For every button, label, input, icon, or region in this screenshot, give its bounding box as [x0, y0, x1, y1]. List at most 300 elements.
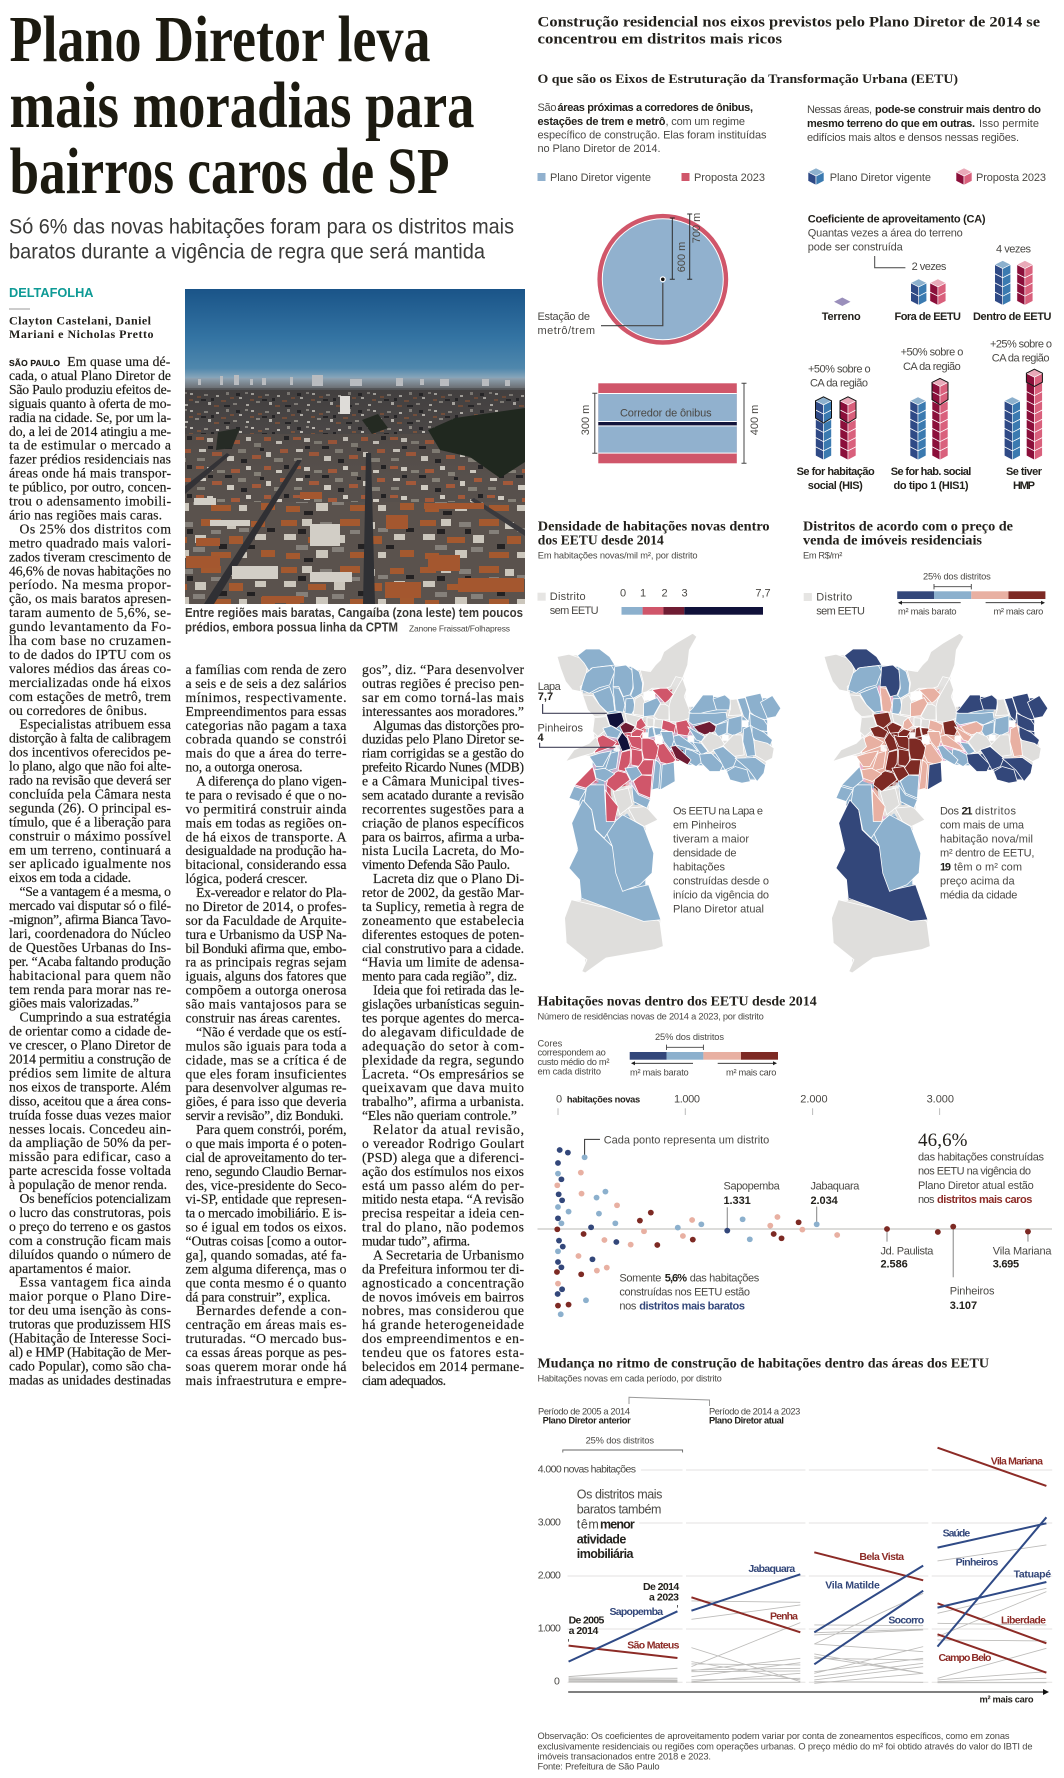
article column 3: duzidas pelo Plano Diretor se-: [362, 732, 524, 747]
slope chart: price direction arrow: m² mais caro: [980, 1695, 1034, 1705]
article column 3: Algumas das distorções pro-: [373, 718, 524, 733]
article column 2: mais do que a área do terre-: [186, 746, 347, 761]
article column 1: -mignon”, afirma Bianca Tavo-: [9, 912, 171, 927]
article column 3: ta Suplicy, remetia à regra de: [362, 899, 524, 914]
article column 2: “Não é verdade que os estí-: [196, 1024, 347, 1039]
article column 1: ção, os mais baratos apresen-: [9, 591, 171, 606]
article column 1: tor deu uma isenção às cons-: [9, 1303, 171, 1318]
article column 3: ação dos estímulos nos eixos: [362, 1164, 524, 1179]
callout: 46.6% in most expensive districts: nos EETU na vigência do: [918, 1166, 1031, 1178]
cube towers: popular market housing HMP: +25% sobre o: [990, 339, 1052, 351]
legend: dot colours: correspondem ao: [538, 1048, 606, 1058]
dot labels: 3.107: [950, 1300, 977, 1312]
heading: price map: [803, 520, 1013, 560]
article column 1: maior porque o Plano Dire-: [9, 1289, 171, 1304]
article column 1: de Questões Urbanas do Ins-: [9, 940, 171, 955]
article column 2: tura e Urbanismo da USP Na-: [186, 927, 347, 942]
article column 3: o vereador Rodrigo Goulart: [362, 1136, 524, 1151]
legend: comparison periods: 25% dos distritos: [586, 1435, 654, 1445]
cube towers: inside EETU: 4 vezes: [996, 244, 1032, 256]
annotation: density map: em Pinheiros: [673, 820, 737, 832]
diagram: station radius circle: Estação de: [538, 311, 590, 323]
article column 3: plexidade da regra, segundo: [362, 1052, 524, 1067]
annotation: price map: distritos: [975, 806, 1016, 818]
article column 3: Relator da atual revisão,: [373, 1122, 524, 1137]
article column 2: ra as principais regras sejam: [186, 955, 347, 970]
article column 3: interessantes aos moradores.”: [362, 704, 524, 719]
text block: building coefficient: pode ser construída: [808, 242, 904, 254]
article column 3: Lacreta diz que o Plano Di-: [373, 871, 524, 886]
article column 1: siguais quanto à oferta de mo-: [9, 396, 171, 411]
subtitle: [9, 216, 514, 264]
dot labels: [604, 1134, 1052, 1312]
slope chart axis labels: [538, 1463, 636, 1688]
slope chart axis labels: 3.000: [538, 1516, 561, 1528]
article column 3: Ideia que foi retirada das le-: [373, 983, 524, 998]
article column 2: truturadas. “O mercado bus-: [186, 1331, 347, 1346]
article column 1: à população de menor renda.: [9, 1177, 167, 1192]
text block: higher building capacity: edifícios mais altos e densos nessas regiões.: [807, 132, 1019, 144]
text block: higher building capacity: mesmo terreno do que em outras.: [807, 118, 975, 130]
cube towers: social housing type 1: +50% sobre o: [901, 347, 963, 359]
article column 3: mento para cada região”, diz.: [362, 969, 517, 984]
article column 2: bil Bonduki afirma que, embo-: [186, 941, 347, 956]
article column 3: outras regiões é preciso pen-: [362, 676, 524, 691]
callout: 5.6% in cheapest districts: distritos mais baratos: [639, 1300, 745, 1312]
legend: dot colours: em cada distrito: [538, 1067, 601, 1077]
article column 2: servir a revisão”, diz Bonduki.: [186, 1108, 344, 1123]
article column 1: período. Na mesma propor-: [9, 577, 171, 592]
article column 1: de orientar como a cidade de-: [9, 1024, 171, 1039]
cube towers: outside EETU: 2 vezes: [912, 261, 947, 273]
legend: density scale: 7,7: [755, 588, 771, 600]
annotation: price map: têm o m² com: [954, 862, 1022, 874]
slope chart: grid: [568, 1470, 1052, 1682]
photo: aerial view of Cangaíba: [185, 289, 525, 604]
text block: higher building capacity: Isso permite: [979, 118, 1039, 130]
article column 1: trutoras que produzissem HIS: [9, 1317, 171, 1332]
callout: 46.6% in most expensive districts: distritos mais caros: [937, 1194, 1032, 1206]
dot labels: Sapopemba: [724, 1180, 781, 1192]
text block: building coefficient: [808, 214, 986, 268]
article column 1: Especialistas atribuem essa: [20, 717, 171, 732]
article column 2: so é igual em todos os eixos.: [186, 1220, 346, 1235]
dot chart: housing per district: [554, 1139, 1031, 1317]
graphic main heading: Construção residencial nos eixos previstos pelo Plano Diretor de 2014 se: [538, 14, 1040, 30]
article column 2: [186, 662, 347, 1388]
heading: density map: Em habitações novas/mil m², por distrito: [538, 550, 698, 560]
callout: 46.6% in most expensive districts: 46,6%: [918, 1130, 968, 1151]
article column 2: o que mais importa é o poten-: [186, 1136, 347, 1151]
legend: comparison periods: Plano Diretor atual: [709, 1415, 784, 1425]
article column 2: bitacional, considerando essa: [186, 857, 346, 872]
cube towers: popular market housing HMP: HMP: [1013, 480, 1035, 492]
callout: 5.6% in cheapest districts: nos: [619, 1300, 637, 1312]
annotation: price map: 19: [940, 862, 951, 874]
diagram: bus corridor: 300 m: [580, 405, 592, 435]
heading: price map: Distritos de acordo com o preço de: [803, 520, 1013, 535]
slope chart: labels: Bela Vista: [859, 1551, 904, 1563]
cube towers: social housing type 1: CA da região: [903, 361, 961, 373]
legend: dot colours: 25% dos distritos: [655, 1032, 724, 1042]
article column 1: per. “Acaba faltando produção: [9, 954, 171, 969]
diagram: station radius circle: [538, 213, 728, 345]
article column 2: Empreendimentos para essas: [186, 704, 346, 719]
article column 1: “Se a vantagem é a mesma, o: [20, 884, 171, 899]
callout: 5.6% in cheapest districts: construídas nos EETU estão: [619, 1286, 750, 1298]
cube towers: outside EETU: [894, 261, 961, 323]
article column 2: no Diretor de 2014, o profes-: [186, 899, 347, 914]
article column 2: Bernardes defende a con-: [196, 1303, 347, 1318]
annotation: cheapest districts lower activity: Os distritos mais: [577, 1488, 662, 1502]
article column 3: nobres, mas considerou que: [362, 1303, 524, 1318]
article column 1: radia na cidade. Se, por um la-: [9, 410, 171, 425]
article column 1: diluídos quando o número de: [9, 1247, 171, 1262]
dot labels: Vila Mariana: [993, 1245, 1052, 1257]
annotation: density map: habitações: [673, 862, 726, 874]
article column 1: (Habitação de Interesse Soci-: [9, 1330, 171, 1346]
cube towers: inside EETU: [973, 244, 1052, 323]
axis: new housing units: habitações novas: [567, 1095, 640, 1105]
legend: cube colours: [808, 168, 1046, 185]
article column 1: Os benefícios potencializam: [20, 1191, 171, 1206]
legend: price quartiles: [804, 571, 1045, 618]
article column 1: nesses locais. Concedeu ain-: [9, 1121, 171, 1136]
heading: density map: Densidade de habitações novas dentro: [538, 520, 770, 535]
legend: price quartiles: sem EETU: [816, 606, 865, 618]
article column 1: SÃO PAULO: [9, 358, 60, 368]
annotation: density map: construídas desde o: [673, 876, 769, 888]
heading: price map: venda de imóveis residenciais: [803, 534, 983, 549]
callouts: Lapa and Pinheiros: 4: [538, 732, 544, 744]
axis: new housing units: [538, 1094, 1052, 1229]
dot labels: Jabaquara: [810, 1180, 860, 1192]
article column 2: Ex-vereador e relator do Pla-: [196, 885, 347, 900]
legend: price quartiles: m² mais barato: [898, 606, 957, 616]
article column 2: mais infraestrutura e empre-: [186, 1373, 347, 1388]
slope chart: labels: De 2005: [569, 1614, 605, 1626]
annotation: density map: Os EETU na Lapa e: [673, 806, 763, 818]
slope chart: labels: Pinheiros: [956, 1557, 998, 1569]
callout: 5.6% in cheapest districts: [619, 1272, 760, 1312]
diagram: bus corridor: 400 m: [749, 405, 761, 435]
article column 2: ta o mercado imobiliário. E is-: [186, 1206, 347, 1221]
article column 3: vimento Defenda São Paulo.: [362, 857, 510, 872]
annotation: price map: Dos: [940, 806, 960, 818]
article column 1: parte acrescida fosse voltada: [9, 1163, 171, 1178]
legend: dot colours: m² mais barato: [630, 1068, 689, 1078]
article column 3: nista Lucila Lacreta, do Mo-: [362, 843, 524, 858]
article column 2: compõem a outorga onerosa: [186, 983, 346, 998]
article column 3: mudar tudo”, afirma.: [362, 1234, 470, 1248]
text block: building coefficient: Quantas vezes a área do terreno: [808, 228, 963, 240]
legend: price quartiles: m² mais caro: [994, 606, 1043, 616]
heading: new housing dot chart: Número de residências novas de 2014 a 2023, por distrito: [538, 1011, 764, 1021]
article column 2: dá para construir”, explica.: [186, 1289, 330, 1304]
article column 1: mercializadas onde há eixos: [9, 675, 171, 690]
cube towers: outside EETU: Fora de EETU: [894, 311, 961, 323]
slope chart: price direction arrow: [568, 1689, 1049, 1705]
annotation: price map: [940, 806, 1034, 901]
callouts: Lapa and Pinheiros: 7,7: [538, 691, 553, 703]
article column 2: que eles foram insuficientes: [186, 1066, 346, 1081]
article column 2: vo permitirá construir ainda: [186, 801, 346, 816]
article column 3: Lacreta. “Os empresários se: [362, 1066, 524, 1081]
callouts: Lapa and Pinheiros: [538, 681, 615, 747]
article column 3: tes porque agentes do merca-: [362, 1010, 524, 1026]
article column 3: prefeito Ricardo Nunes (MDB): [362, 760, 524, 776]
article column 3: A Secretaria de Urbanismo: [373, 1248, 524, 1262]
article column 3: criação de planos específicos: [362, 815, 524, 830]
article column 1: valores médios das áreas co-: [9, 661, 171, 676]
article column 1: disso, aceitou que a área cons-: [9, 1093, 171, 1108]
article column 3: há grande heterogeneidade: [362, 1317, 524, 1332]
slope chart: labels: Saúde: [943, 1527, 970, 1539]
heading: density map: dos EETU desde 2014: [538, 534, 664, 549]
legend: density scale: 2: [661, 588, 668, 600]
callout: 5.6% in cheapest districts: das habitações: [690, 1272, 760, 1284]
article column 1: [9, 354, 171, 1387]
label: Terreno: Terreno: [822, 311, 861, 323]
annotation: cheapest districts lower activity: [577, 1488, 662, 1561]
article column 2: de há eixos de transporte. A: [186, 829, 347, 844]
slope chart: third quartile: [814, 1552, 923, 1683]
slope chart: cheapest quartile: [569, 1605, 677, 1682]
article column 2: ga], quando somadas, até fa-: [186, 1248, 347, 1262]
annotation: cheapest districts lower activity: baratos também: [577, 1502, 661, 1516]
article column 1: tímulo, que é a liberação para: [9, 814, 171, 829]
article column 3: “Eles não queriam controle.”: [362, 1108, 517, 1123]
dot labels: 2.034: [810, 1195, 839, 1207]
article column 3: dos empreendimentos e en-: [362, 1331, 524, 1346]
article column 1: metro quadrado mais valori-: [9, 535, 171, 550]
article column 1: Os 25% dos distritos com: [20, 521, 171, 536]
article column 1: nos eixos de transporte. Além: [9, 1079, 171, 1094]
article column 2: mais em todas as regiões on-: [186, 815, 347, 830]
article column 3: gos”, diz. “Para desenvolver: [362, 662, 524, 677]
article column 1: te público, por outro, concen-: [9, 480, 171, 495]
legend: density scale: Distrito: [550, 591, 586, 603]
article column 2: cobrada quando se constrói: [186, 732, 347, 747]
legend: dot colours: custo médio do m²: [538, 1057, 610, 1067]
slope chart: labels: Penha: [770, 1610, 798, 1622]
article column 3: tral do plano, não podemos: [362, 1220, 524, 1235]
legend: circle and corridor colours: Proposta 2023: [694, 172, 765, 184]
heading: price map: Em R$/m²: [803, 550, 842, 560]
annotation: density map: densidade de: [673, 848, 736, 860]
dot labels: Pinheiros: [950, 1286, 995, 1298]
slope chart axis labels: 4.000 novas habitações: [538, 1463, 636, 1475]
article column 1: tem renda para morar nas re-: [9, 982, 171, 997]
article column 1: eixos em toda a cidade.: [9, 870, 131, 885]
callout: 5.6% in cheapest districts: 5,6%: [665, 1272, 687, 1284]
slope chart: labels: Socorro: [888, 1614, 924, 1626]
article column 2: que conta mesmo é o quanto: [186, 1275, 347, 1290]
footnote and source: exclusivamente residenciais ou regiões com operações urbanas. O preço médio do m² foi obtido através do valor do IBTI de: [538, 1742, 1032, 1752]
cube towers: social housing HIS: [797, 364, 875, 492]
article column 1: apartamentos é maior.: [9, 1261, 131, 1276]
article column 2: para desenvolver algumas re-: [186, 1080, 347, 1095]
annotation: cheapest districts lower activity: têm: [577, 1518, 599, 1532]
legend: price quartiles: Distrito: [816, 592, 852, 604]
legend: comparison periods: [538, 1397, 800, 1452]
slope chart: labels: Sapopemba: [610, 1606, 663, 1618]
legend: cube colours: Proposta 2023: [976, 172, 1046, 184]
heading: pace of construction: [538, 1356, 989, 1384]
article column 2: reno, segundo Claudio Bernar-: [186, 1164, 347, 1179]
axis: new housing units: 2.000: [800, 1094, 828, 1106]
diagram: bus corridor: [580, 383, 761, 463]
article column 2: lógica, poderá crescer.: [186, 871, 308, 886]
article column 2: a famílias com renda de zero: [186, 662, 347, 677]
article column 1: cado Popular), como são cha-: [9, 1358, 171, 1374]
article column 3: adequação do setor à com-: [362, 1038, 524, 1053]
article column 2: iguais, alguns dos fatores que: [186, 969, 346, 984]
article column 1: fazer prédios residenciais nas: [9, 452, 171, 467]
article column 3: cial construtivo para a cidade.: [362, 941, 524, 956]
article column 3: sar em como torná-las mais: [362, 690, 524, 705]
article column 1: com a construção ficam mais: [9, 1233, 171, 1248]
article column 2: te para o revisado é que o no-: [186, 788, 347, 802]
cube towers: social housing type 1: do tipo 1 (HIS1): [894, 480, 969, 492]
cube towers: social housing HIS: Se for habitação: [797, 466, 875, 478]
article column 1: taram aumento de 5,6%, se-: [9, 605, 171, 620]
article column 3: queixavam que dava muito: [362, 1080, 524, 1095]
legend: density scale: 1: [640, 588, 646, 600]
article column 3: sem acatado durante a revisão: [362, 788, 524, 802]
article column 1: com estações de metrô, trem: [9, 689, 171, 704]
slope chart: labels: [569, 1455, 1051, 1664]
slope chart: labels: a 2023: [649, 1591, 679, 1603]
article column 3: tendeu que os fatores esta-: [362, 1345, 524, 1360]
heading: what are EETU: O que são os Eixos de Estruturação da Transformação Urbana (EETU): [538, 71, 958, 86]
article column 1: cada, o atual Plano Diretor de: [9, 368, 171, 383]
dot labels: 2.586: [880, 1258, 908, 1270]
title: Plano Diretor leva: [10, 3, 430, 76]
cube towers: popular market housing HMP: [990, 339, 1052, 492]
article column 3: da Prefeitura informou ter di-: [362, 1261, 524, 1276]
legend: density scale: 3: [682, 588, 688, 600]
photo caption: prédios, embora possua linha da CPTM: [185, 620, 398, 634]
slope chart: labels: De 2014: [643, 1581, 679, 1593]
subtitle: baratos durante a vigência de regra que será mantida: [9, 241, 485, 264]
article column 1: ser aplicado igualmente nos: [9, 856, 171, 871]
callouts: Lapa and Pinheiros: Lapa: [538, 681, 562, 693]
article column 2: desigualdade na produção ha-: [186, 843, 347, 858]
article column 1: rado na revisão que deverá ser: [9, 772, 171, 788]
annotation: price map: 21: [962, 806, 972, 818]
article column 3: zoneamento que estabelecia: [362, 913, 524, 928]
footnote and source: Fonte: Prefeitura de São Paulo: [538, 1762, 660, 1772]
legend: dot colours: [538, 1032, 778, 1078]
title: mais moradias para: [10, 69, 474, 142]
legend: density scale: sem EETU: [550, 605, 599, 617]
cube towers: social housing HIS: social (HIS): [808, 480, 863, 492]
article column 2: giões, é para isso que deveria: [186, 1094, 346, 1109]
title: [10, 3, 474, 208]
icon: land diamond: [834, 298, 850, 306]
article column 3: mitido nesta etapa. “A revisão: [362, 1192, 524, 1207]
legend: density scale: [538, 588, 771, 617]
article column 3: (PSD) alega que a diferenci-: [362, 1150, 524, 1166]
heading: density map: [538, 520, 770, 560]
diagram: station radius circle: 600 m: [676, 242, 688, 272]
cube towers: social housing HIS: +50% sobre o: [808, 364, 871, 376]
graphic main heading: concentrou em distritos mais ricos: [538, 32, 782, 48]
article column 1: mercado vai disputar só o filé-: [9, 898, 171, 913]
byline: [9, 314, 154, 341]
section tag: Deltafolha: DELTAFOLHA: [9, 286, 93, 300]
article column 1: São Paulo produziu efeitos de-: [9, 382, 171, 397]
article column 1: Em quase uma dé-: [67, 354, 171, 369]
article column 1: Essa vantagem fica ainda: [20, 1275, 171, 1290]
text block: definition of EETU: específico de construção. Elas foram instituídas: [538, 130, 767, 142]
article column 1: construir o máximo possível: [9, 828, 171, 843]
dot labels: 1.331: [724, 1195, 751, 1207]
callout: 46.6% in most expensive districts: nos: [918, 1194, 935, 1206]
legend: comparison periods: Período de 2014 a 2023: [709, 1406, 800, 1416]
photo caption: Zanone Fraissat/Folhapress: [409, 624, 510, 634]
byline: Clayton Castelani, Daniel: [9, 314, 152, 328]
legend: comparison periods: Plano Diretor anterior: [543, 1415, 631, 1425]
diagram: station radius circle: 700 m: [691, 213, 703, 243]
article column 1: ário nas regiões mais caras.: [9, 508, 162, 522]
article column 1: gundo levantamento da Fo-: [9, 619, 171, 634]
annotation: cheapest districts lower activity: menor: [600, 1518, 635, 1532]
legend: dot colours: Cores: [538, 1039, 563, 1049]
byline: Mariani e Nicholas Pretto: [9, 327, 154, 341]
article column 2: ca essas áreas porque as pes-: [186, 1345, 347, 1360]
diagram: bus corridor: Corredor de ônibus: [620, 408, 712, 420]
legend: dot colours: m² mais caro: [726, 1068, 776, 1078]
slope chart: second quartile: [691, 1574, 800, 1682]
article column 3: riam corrigidas se a gestão do: [362, 746, 524, 761]
callout: 46.6% in most expensive districts: das habitações construídas: [918, 1151, 1044, 1163]
callout: 5.6% in cheapest districts: Somente: [619, 1272, 661, 1284]
axis: new housing units: 1.000: [674, 1094, 700, 1106]
article column 1: o preço do terreno e os gastos: [9, 1219, 171, 1234]
article column 2: vi-SP, entidade que represen-: [186, 1192, 347, 1207]
article column 1: o lucro das construtoras, pois: [9, 1205, 171, 1220]
cube towers: social housing type 1: Se for hab. social: [891, 466, 971, 478]
article column 3: belecidos em 2014 permane-: [362, 1359, 524, 1374]
article column 2: sor da Faculdade de Arquite-: [186, 913, 347, 928]
slope chart: most expensive quartile: [938, 1448, 1046, 1683]
article column 1: lo plano, algo que não foi alte-: [9, 759, 171, 774]
text block: higher building capacity: Nessas áreas,: [807, 104, 872, 116]
article column 1: do, a lei de 2014 atingiu a me-: [9, 424, 171, 439]
article column 2: A diferença do plano vigen-: [196, 774, 347, 788]
article column 1: trou o adensamento imobili-: [9, 494, 171, 508]
footnote and source: Observação: Os coeficientes de aproveitamento podem variar por conta de zoneamentos específicos, como em zonas: [538, 1731, 1010, 1741]
legend: price quartiles: 25% dos distritos: [923, 571, 991, 581]
article column 3: gislações urbanísticas seguin-: [362, 997, 524, 1012]
heading: new housing dot chart: Habitações novas dentro dos EETU desde 2014: [538, 994, 817, 1009]
article column 1: da ampliação de 50% da per-: [9, 1135, 171, 1150]
text block: definition of EETU: no Plano Diretor de 2014.: [538, 143, 660, 155]
graphic main heading: [538, 14, 1040, 48]
article column 2: “Outras coisas [como a outor-: [186, 1234, 347, 1248]
article column 3: [362, 662, 524, 1388]
annotation: cheapest districts lower activity: imobiliária: [577, 1547, 635, 1561]
slope chart: labels: Liberdade: [1001, 1614, 1046, 1626]
article column 3: “Havia um limite de adensa-: [362, 955, 524, 970]
slope chart: labels: Jabaquara: [748, 1563, 795, 1575]
annotation: price map: m² dentro de EETU,: [940, 848, 1034, 860]
text block: building coefficient: Coeficiente de aproveitamento (CA): [808, 214, 986, 226]
article column 3: e a Câmara Municipal tives-: [362, 774, 524, 788]
article column 3: agnosticado a concentração: [362, 1275, 524, 1290]
